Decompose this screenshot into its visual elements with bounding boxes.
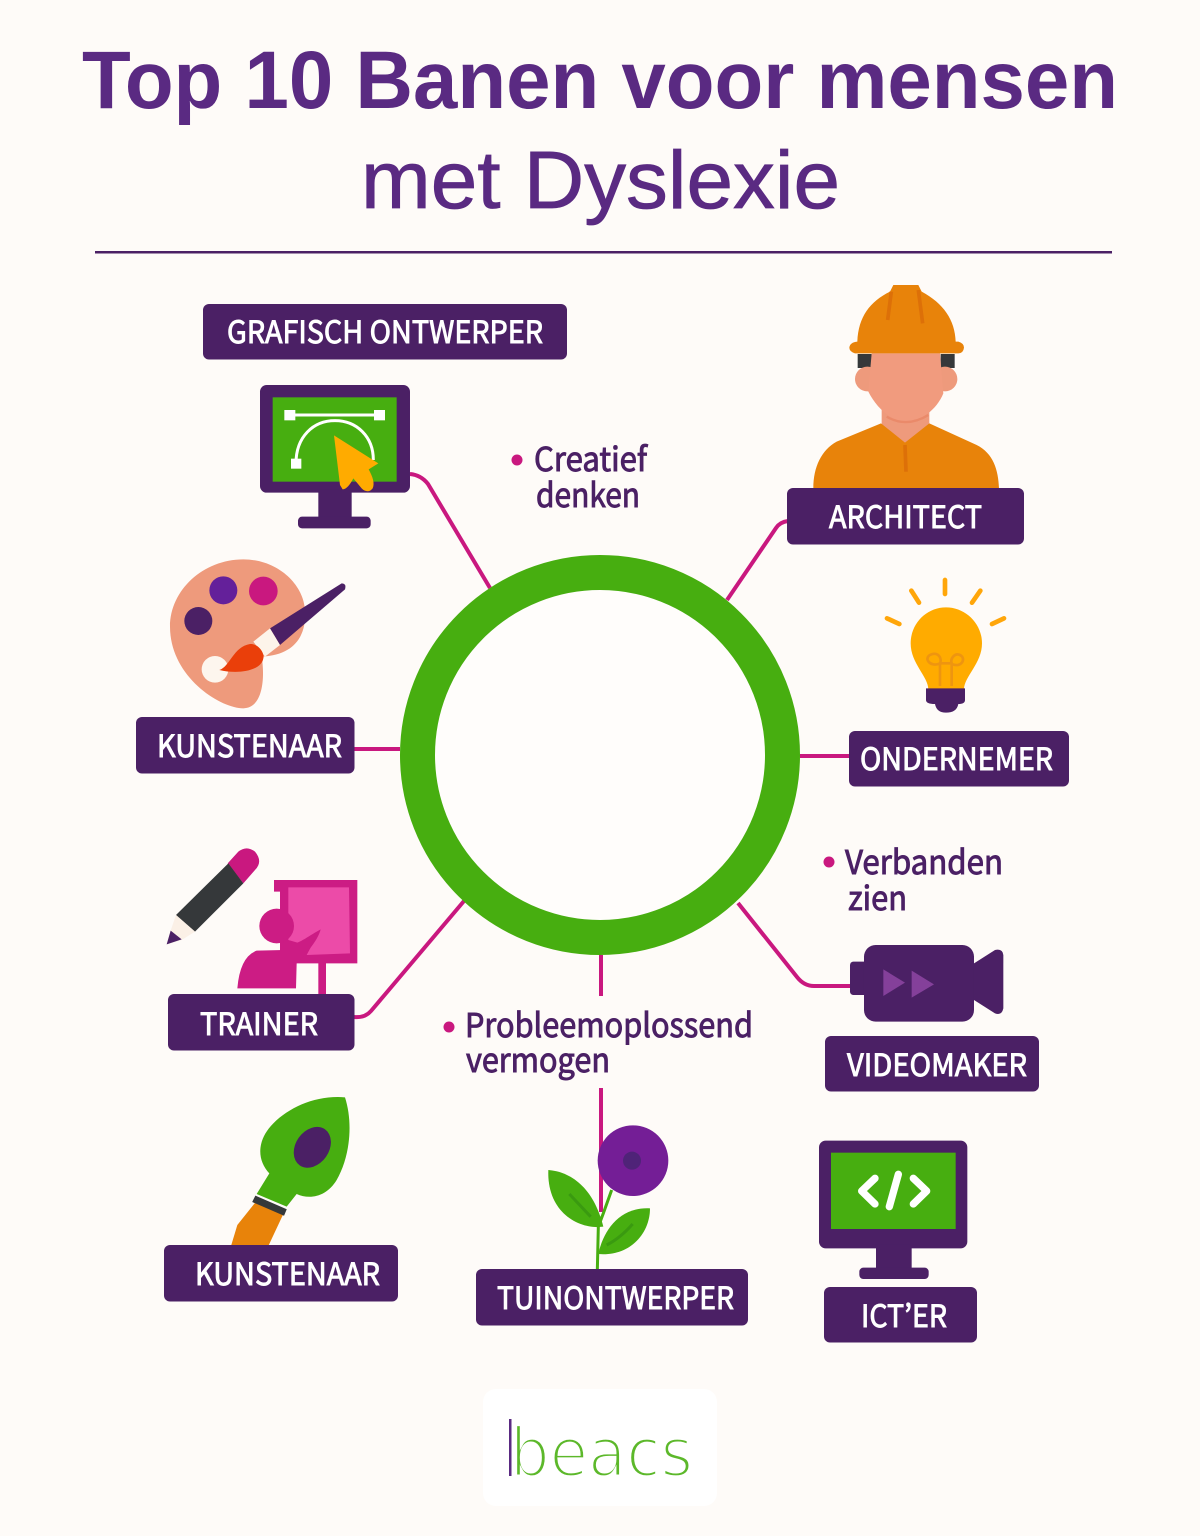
icon: trainer at board xyxy=(237,880,357,997)
icon: flower xyxy=(548,1125,668,1270)
title: met Dyslexie xyxy=(361,135,840,226)
label: trainer: TRAINER xyxy=(200,999,318,1044)
icon: code monitor xyxy=(819,1141,967,1279)
label: videomaker: VIDEOMAKER xyxy=(847,1040,1027,1085)
icon: video camera xyxy=(850,945,1003,1022)
label: ict'er: ICT’ER xyxy=(861,1291,947,1336)
bullet: verbanden zien xyxy=(824,836,1003,920)
icon: paint palette xyxy=(170,559,345,708)
title: Top 10 Banen voor mensen xyxy=(82,35,1118,126)
bullet: creatief denken: Creatief xyxy=(534,433,648,481)
connector lines xyxy=(354,474,851,1212)
bullet: creatief denken xyxy=(512,433,648,517)
bullet: verbanden zien: Verbanden xyxy=(845,836,1003,884)
label: trainer xyxy=(168,994,354,1050)
icon: green paintbrush xyxy=(231,1097,350,1246)
icon: pencil xyxy=(167,848,259,944)
label: ict'er xyxy=(824,1287,977,1342)
bullet: creatief denken: denken xyxy=(536,469,640,517)
logo xyxy=(483,1389,717,1506)
bullet: probleemoplossend vermogen: Probleemoplossend xyxy=(465,999,753,1047)
label: architect: ARCHITECT xyxy=(829,492,982,537)
label: kunstenaar: KUNSTENAAR xyxy=(157,721,342,766)
label: tuinontwerper: TUINONTWERPER xyxy=(497,1273,734,1318)
label: architect xyxy=(787,488,1024,544)
label: ondernemer: ONDERNEMER xyxy=(860,734,1053,779)
bullet: verbanden zien: zien xyxy=(848,872,907,920)
label: kunstenaar second: KUNSTENAAR xyxy=(195,1249,380,1294)
icon: light bulb xyxy=(887,580,1004,713)
label: grafisch ontwerper: GRAFISCH ONTWERPER xyxy=(227,307,543,352)
icon: design monitor xyxy=(260,385,410,528)
logo: beacs xyxy=(510,1414,693,1493)
central green ring xyxy=(418,572,782,938)
title xyxy=(82,35,1118,226)
label: kunstenaar second xyxy=(164,1245,398,1302)
icon: architect with hard hat xyxy=(813,285,999,488)
bullet: probleemoplossend vermogen xyxy=(444,999,753,1082)
bullet: probleemoplossend vermogen: vermogen xyxy=(466,1034,610,1082)
